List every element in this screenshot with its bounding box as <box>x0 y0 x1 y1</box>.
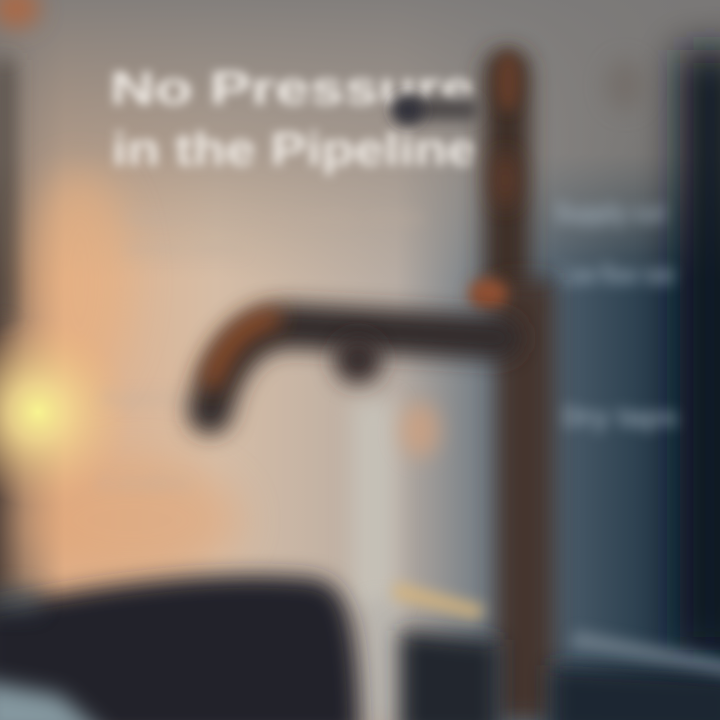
tap spout <box>210 318 500 412</box>
pipe valve knob <box>393 96 479 124</box>
body text: left column: Leaks <box>100 470 190 495</box>
title: in the Pipeline <box>112 123 477 175</box>
body text: left column: across towns <box>125 235 245 260</box>
body text: right column: Supply cut <box>555 197 665 228</box>
body text: right column: Dry taps <box>560 401 678 432</box>
body text: left column <box>100 205 425 495</box>
basin <box>0 575 720 720</box>
title <box>110 62 477 175</box>
sun glow <box>0 317 133 507</box>
body text: right column <box>555 197 678 432</box>
body text: left column: Ageing <box>100 385 190 410</box>
body text: left column: Water supply is under strain <box>125 205 425 230</box>
vertical pipe <box>468 50 554 720</box>
water stream <box>352 400 440 720</box>
title: No Pressure <box>110 62 475 114</box>
